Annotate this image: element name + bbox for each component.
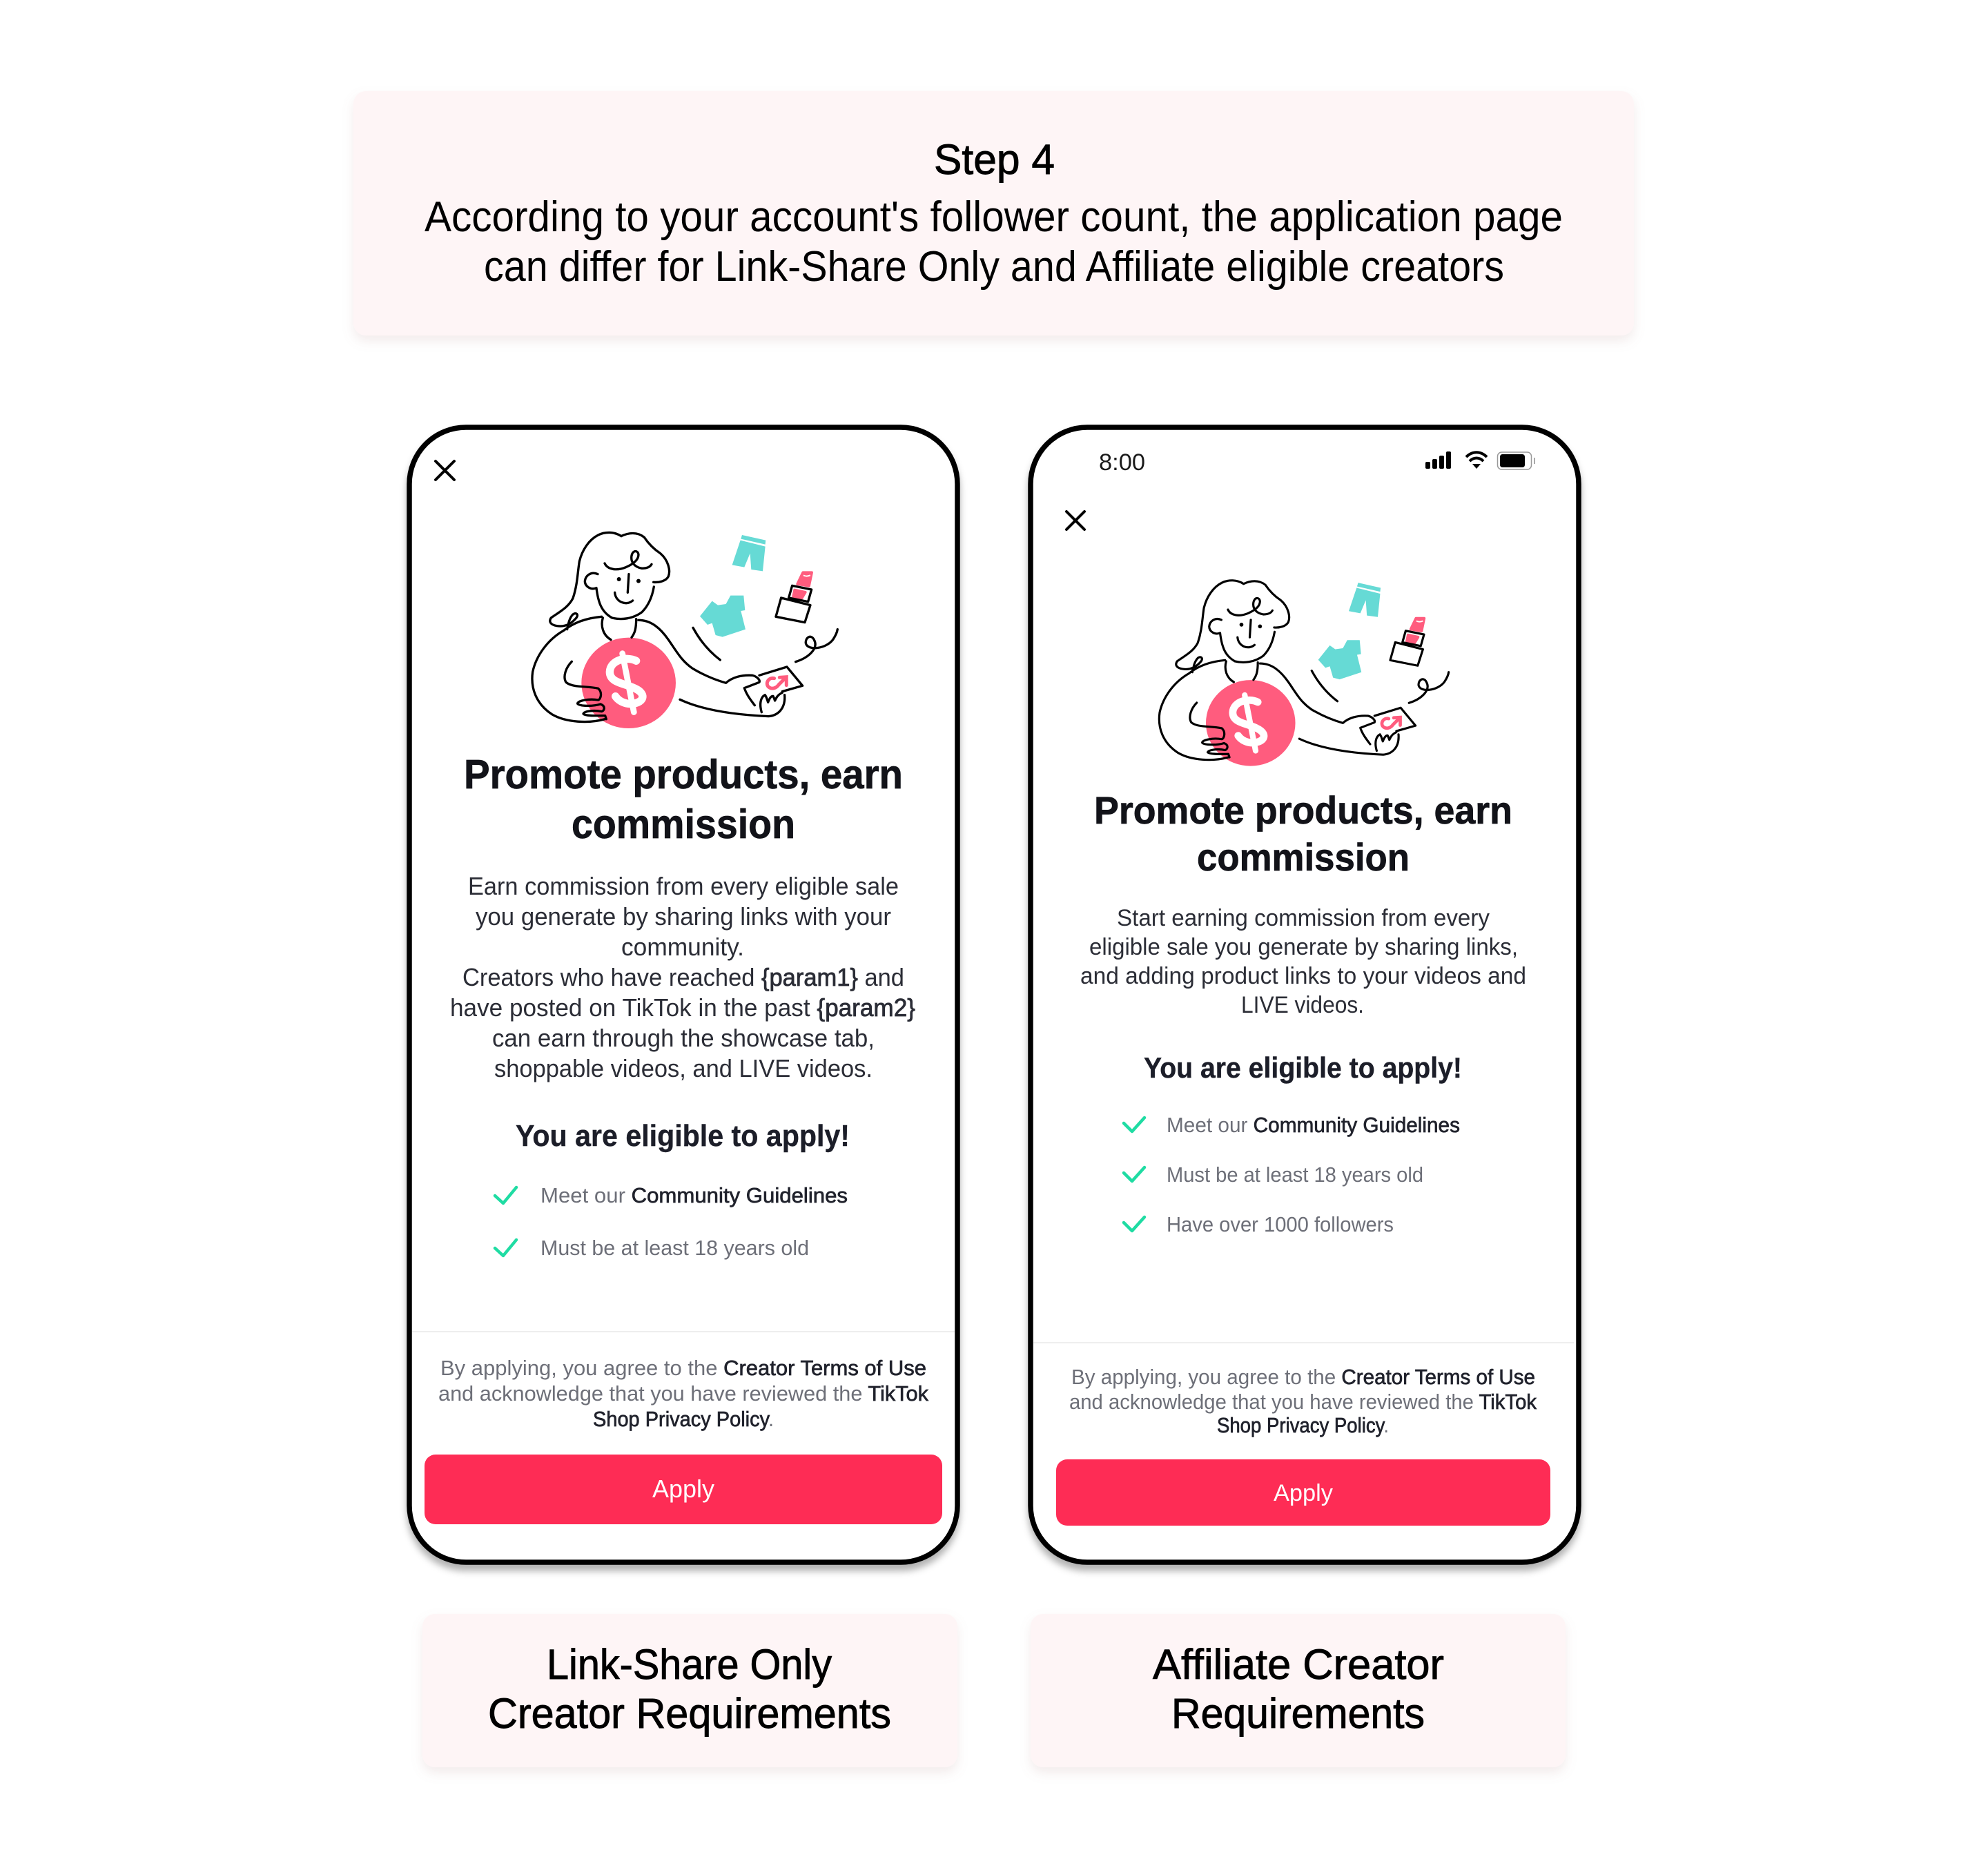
text: header description line one: According to your account's follower count, the application page xyxy=(425,193,1563,241)
text: program description xyxy=(1080,905,1526,1018)
text: program description xyxy=(450,872,915,1082)
requirement: community guidelines: Meet our Community Guidelines xyxy=(1167,1113,1460,1137)
icon: close xyxy=(436,461,454,480)
text: program description: can earn through the showcase tab, xyxy=(492,1024,875,1052)
heading: step number: Step 4 xyxy=(934,136,1055,183)
text: terms agreement xyxy=(438,1356,928,1431)
panel: link-share only caption: Creator Requirements xyxy=(488,1690,891,1737)
panel: step 4 header xyxy=(353,91,1634,336)
panel: affiliate creator caption: Requirements xyxy=(1171,1690,1425,1737)
heading: promote products xyxy=(1094,788,1512,879)
text: terms agreement: Shop Privacy Policy. xyxy=(1217,1413,1389,1437)
text: program description: eligible sale you generate by sharing links, xyxy=(1089,934,1518,960)
icon: close xyxy=(1066,512,1084,529)
heading: promote products: commission xyxy=(572,801,795,847)
heading: promote products: commission xyxy=(1197,835,1410,879)
requirement: community guidelines: Meet our Community Guidelines xyxy=(540,1183,848,1207)
illustration: creator with dollar coin xyxy=(532,532,837,728)
text: program description: and adding product links to your videos and xyxy=(1080,963,1526,989)
heading: eligibility: You are eligible to apply! xyxy=(1144,1051,1462,1084)
panel: link-share only phone xyxy=(409,427,957,1562)
requirement: follower count: Have over 1000 followers xyxy=(1167,1212,1394,1236)
illustration: creator with dollar coin xyxy=(1159,581,1449,766)
text: program description: you generate by sharing links with your xyxy=(476,902,891,931)
status bar time: 8:00 xyxy=(1099,449,1145,476)
heading: promote products xyxy=(464,752,903,847)
panel: affiliate creator caption: Affiliate Creator xyxy=(1153,1641,1444,1688)
heading: promote products: Promote products, earn xyxy=(1094,788,1512,832)
panel: link-share only caption xyxy=(422,1614,957,1767)
heading: eligibility: You are eligible to apply! xyxy=(516,1119,850,1153)
requirement: minimum age: Must be at least 18 years old xyxy=(1167,1163,1423,1187)
text: terms agreement: By applying, you agree to the Creator Terms of Use xyxy=(440,1356,926,1380)
button: apply: Apply xyxy=(1274,1480,1333,1506)
text: terms agreement xyxy=(1069,1365,1537,1437)
text: program description: Start earning commission from every xyxy=(1117,905,1490,931)
button: apply xyxy=(425,1455,942,1524)
requirement: minimum age: Must be at least 18 years old xyxy=(540,1236,809,1260)
panel: affiliate creator caption xyxy=(1031,1614,1566,1767)
text: program description: community. xyxy=(621,933,744,961)
text: program description: LIVE videos. xyxy=(1241,992,1364,1018)
text: terms agreement: and acknowledge that you have reviewed the TikTok xyxy=(438,1381,928,1406)
text: header description line two: can differ for Link-Share Only and Affiliate eligible creators xyxy=(484,243,1504,291)
button: apply: Apply xyxy=(652,1475,714,1503)
text: program description: Earn commission from every eligible sale xyxy=(468,872,899,900)
panel: affiliate phone xyxy=(1031,427,1579,1562)
text: terms agreement: By applying, you agree to the Creator Terms of Use xyxy=(1071,1365,1535,1389)
panel: link-share only caption: Link-Share Only xyxy=(547,1641,832,1688)
text: program description: shoppable videos, and LIVE videos. xyxy=(494,1054,873,1082)
icon: signal, wifi and battery xyxy=(1425,451,1535,469)
text: terms agreement: Shop Privacy Policy. xyxy=(593,1407,774,1431)
text: program description: have posted on TikTok in the past {param2} xyxy=(450,993,915,1022)
heading: promote products: Promote products, earn xyxy=(464,752,903,797)
text: terms agreement: and acknowledge that you have reviewed the TikTok xyxy=(1069,1390,1537,1414)
text: program description: Creators who have reached {param1} and xyxy=(462,963,904,991)
button: apply xyxy=(1056,1459,1550,1526)
